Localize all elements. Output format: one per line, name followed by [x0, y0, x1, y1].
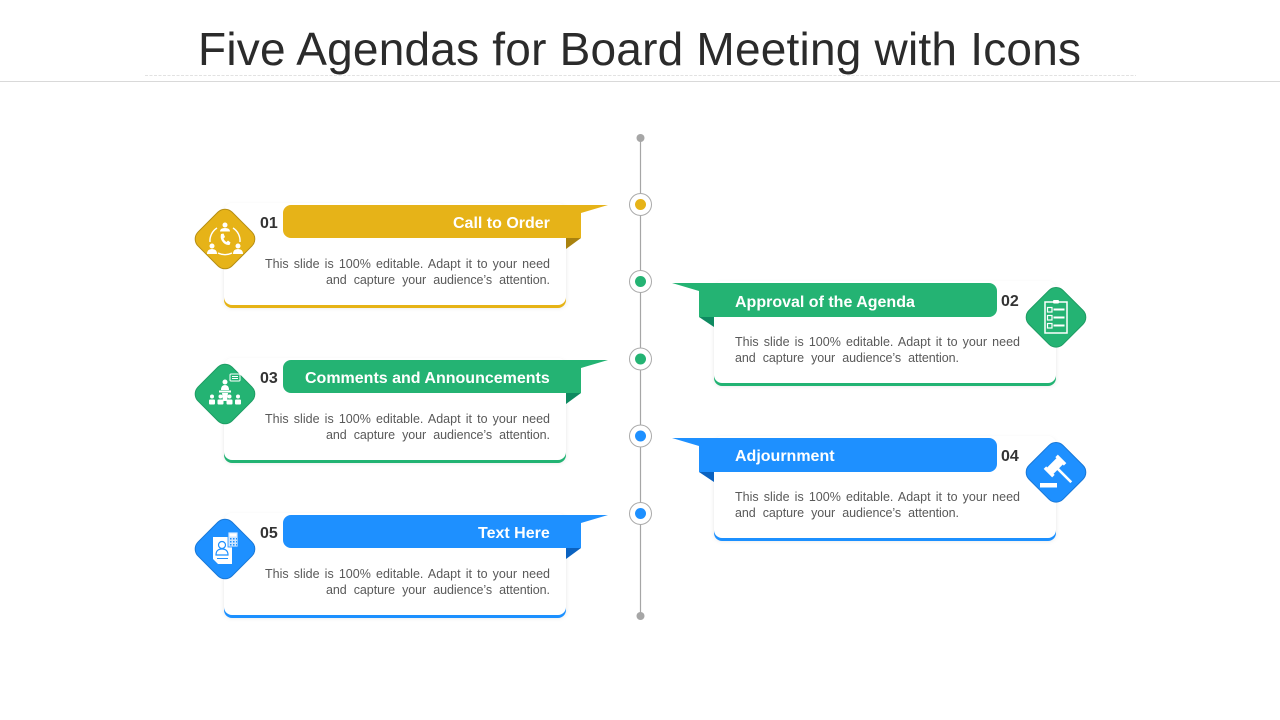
- panel: 01 Call to Order: [191, 203, 608, 308]
- panel: 05 Text Here: 05: [260, 525, 278, 542]
- panel: 04 Adjournment: Adjournment: [735, 448, 835, 465]
- icon: checklist clipboard: [1045, 300, 1067, 333]
- panel: 02 Approval of the Agenda: and capture your audience’s attention.: [735, 351, 959, 365]
- icon: gavel: [1040, 455, 1078, 489]
- panel: 01 Call to Order: Call to Order: [453, 215, 550, 232]
- panel: 01 Call to Order: and capture your audience’s attention.: [326, 273, 550, 287]
- panel: 04 Adjournment: and capture your audience’s attention.: [735, 506, 959, 520]
- panel: 05 Text Here: [191, 513, 608, 618]
- title: Five Agendas for Board Meeting with Icons: [198, 23, 1081, 75]
- panel: 02 Approval of the Agenda: Approval of the Agenda: [735, 294, 915, 311]
- panel: 05 Text Here: and capture your audience’s attention.: [326, 583, 550, 597]
- panel: 05 Text Here: This slide is 100% editable. Adapt it to your need: [265, 567, 550, 581]
- panel: 01 Call to Order: 01: [260, 215, 278, 232]
- panel: 02 Approval of the Agenda: This slide is 100% editable. Adapt it to your need: [735, 335, 1020, 349]
- panel: 04 Adjournment: [672, 436, 1090, 541]
- panel: 03 Comments and Announcements: and capture your audience’s attention.: [326, 428, 550, 442]
- icon: resume and calculator: [213, 532, 238, 564]
- panel: 05 Text Here: Text Here: [478, 525, 550, 542]
- panel: 03 Comments and Announcements: This slide is 100% editable. Adapt it to your need: [265, 412, 550, 426]
- panel: 02 Approval of the Agenda: 02: [1001, 293, 1019, 310]
- panel: 03 Comments and Announcements: 03: [260, 370, 278, 387]
- panel: 01 Call to Order: This slide is 100% editable. Adapt it to your need: [265, 257, 550, 271]
- panel: 03 Comments and Announcements: [191, 358, 608, 463]
- panel: 04 Adjournment: 04: [1001, 448, 1019, 465]
- central timeline: [630, 134, 652, 620]
- icon: speaker and audience: [209, 374, 241, 404]
- panel: 04 Adjournment: This slide is 100% editable. Adapt it to your need: [735, 490, 1020, 504]
- icon: people call circle: [207, 222, 243, 255]
- panel: 02 Approval of the Agenda: [672, 281, 1090, 386]
- panel: 03 Comments and Announcements: Comments and Announcements: [305, 370, 550, 387]
